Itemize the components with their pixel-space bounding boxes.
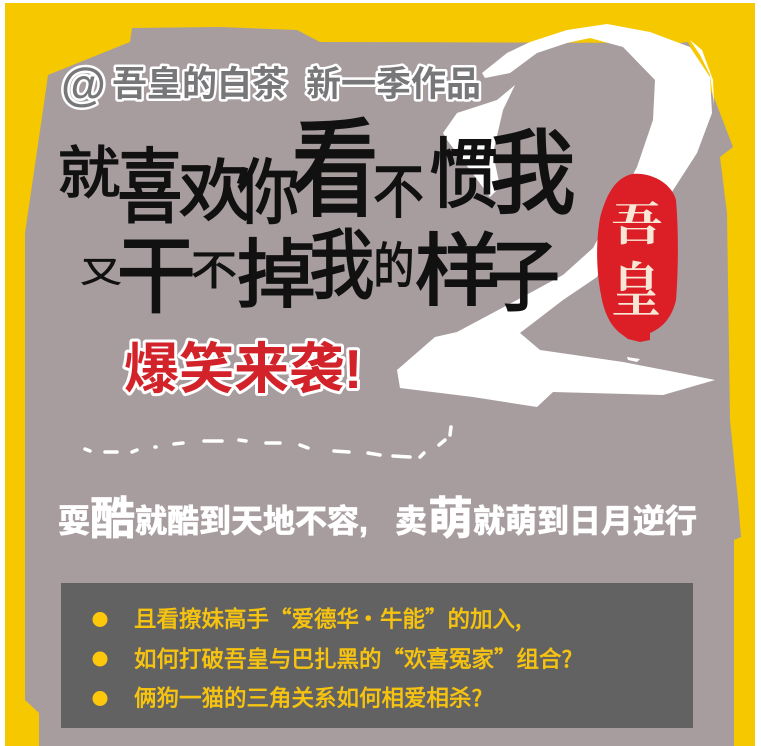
title line 2: 的	[373, 228, 414, 298]
big white brush numeral 2	[397, 24, 715, 407]
title line 2: 子	[487, 213, 560, 327]
title line 2: 干	[117, 208, 196, 330]
bullet points	[92, 612, 108, 706]
title line 1: 喜	[117, 122, 182, 240]
tagline: 酷	[90, 493, 135, 544]
title line 2: 掉	[237, 215, 316, 323]
dark info panel	[61, 583, 693, 728]
tagline: 萌	[428, 493, 473, 544]
seal text: 皇	[611, 243, 661, 328]
seal text	[611, 189, 663, 328]
title line 2: 我	[309, 205, 374, 315]
title line 1: 惯	[429, 113, 498, 223]
dashed white path	[85, 427, 451, 457]
seal text: 吾	[611, 189, 663, 254]
subtitle: author line: 吾皇的白茶	[112, 65, 287, 104]
bullet text: 俩狗一猫的三角关系如何相爱相杀?	[134, 681, 482, 713]
title line 1: 不	[373, 144, 424, 229]
tagline: 耍	[58, 503, 90, 539]
title line 1: 就	[58, 128, 120, 209]
subtitle: author line: 新一季作品	[306, 65, 481, 104]
bullet text	[134, 602, 572, 713]
subtitle: author line	[61, 58, 481, 110]
title line 2: 又	[80, 248, 121, 292]
tagline: 卖	[395, 503, 427, 539]
title line 1: 看	[292, 84, 379, 238]
bullet text: 牛能”的加入,	[380, 602, 521, 634]
slogan: red burst text: 爆笑来袭!	[124, 338, 362, 400]
bullet text: 且看撩妹高手“爱德华	[134, 602, 359, 634]
title line 2	[80, 205, 560, 330]
tagline: 就酷到天地不容,	[135, 503, 368, 539]
tagline: 就萌到日月逆行	[473, 503, 697, 539]
title line 2: 样	[415, 207, 501, 322]
title line 1: 你	[238, 136, 299, 239]
subtitle: author line: @	[61, 58, 106, 110]
bullet text: ·	[357, 602, 380, 634]
title line 1: 我	[490, 99, 576, 232]
title line 2: 不	[191, 237, 237, 297]
red seal with 吾皇	[597, 174, 678, 342]
title line 1: 欢	[179, 138, 251, 235]
panel background	[61, 583, 693, 728]
title line 1	[58, 84, 576, 240]
seal shape	[597, 174, 678, 342]
bullet text: 如何打破吾皇与巴扎黑的“欢喜冤家”组合?	[134, 642, 572, 674]
main title calligraphy	[58, 84, 576, 330]
